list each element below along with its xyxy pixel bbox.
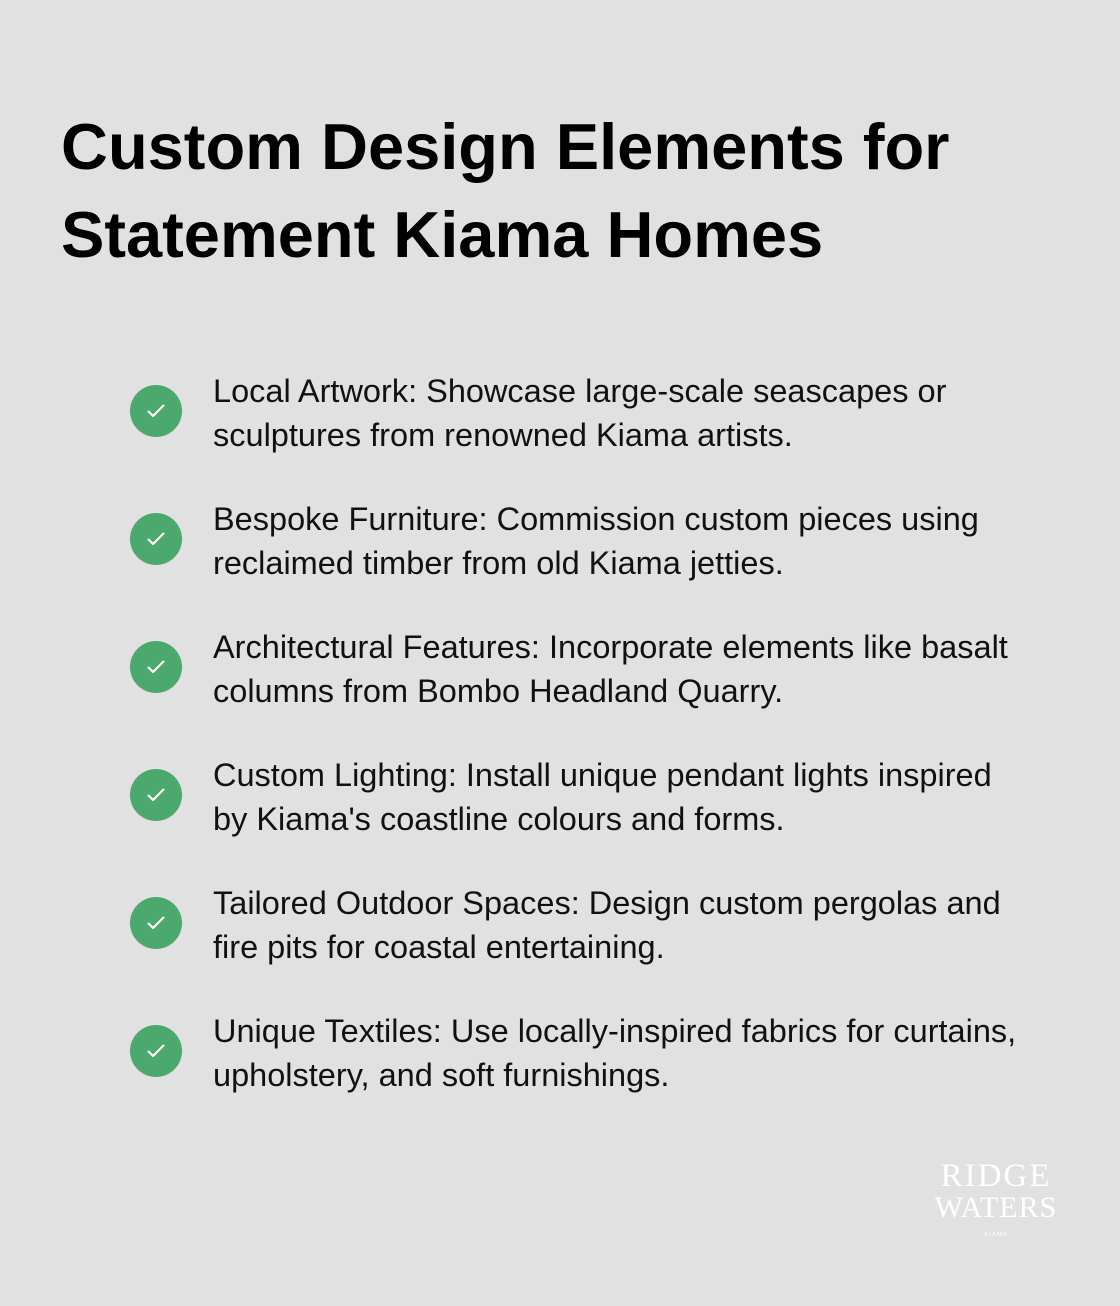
text bbox=[213, 885, 1001, 965]
logo bbox=[934, 1158, 1057, 1238]
text: Tailored Outdoor Spaces: Design custom pergolas and bbox=[213, 885, 1001, 921]
item: architectural features bbox=[130, 629, 1008, 709]
text bbox=[213, 1013, 1016, 1093]
text: upholstery, and soft furnishings. bbox=[213, 1057, 669, 1093]
text: Custom Lighting: Install unique pendant lights inspired bbox=[213, 757, 992, 793]
item: local artwork bbox=[130, 373, 946, 453]
text bbox=[213, 629, 1008, 709]
icon: check bbox=[130, 513, 182, 565]
title: Statement Kiama Homes bbox=[61, 198, 823, 271]
item: outdoor spaces bbox=[130, 885, 1001, 965]
text: fire pits for coastal entertaining. bbox=[213, 929, 665, 965]
text: Architectural Features: Incorporate elements like basalt bbox=[213, 629, 1008, 665]
item: custom lighting bbox=[130, 757, 992, 837]
text: Unique Textiles: Use locally-inspired fabrics for curtains, bbox=[213, 1013, 1016, 1049]
text: sculptures from renowned Kiama artists. bbox=[213, 417, 793, 453]
logo: WATERS bbox=[935, 1191, 1057, 1224]
item: unique textiles bbox=[130, 1013, 1016, 1093]
icon: check bbox=[130, 897, 182, 949]
text: columns from Bombo Headland Quarry. bbox=[213, 673, 783, 709]
icon: check bbox=[130, 385, 182, 437]
text bbox=[213, 373, 946, 453]
logo: RIDGE bbox=[941, 1158, 1051, 1194]
icon: check bbox=[130, 641, 182, 693]
item: bespoke furniture bbox=[130, 501, 979, 581]
icon: check bbox=[130, 1025, 182, 1077]
text bbox=[213, 757, 992, 837]
logo: KIAMA bbox=[984, 1232, 1008, 1238]
text: Local Artwork: Showcase large-scale seascapes or bbox=[213, 373, 946, 409]
text: by Kiama's coastline colours and forms. bbox=[213, 801, 785, 837]
text: Bespoke Furniture: Commission custom pieces using bbox=[213, 501, 979, 537]
text: reclaimed timber from old Kiama jetties. bbox=[213, 545, 784, 581]
title bbox=[61, 110, 949, 271]
text bbox=[213, 501, 979, 581]
title: Custom Design Elements for bbox=[61, 110, 949, 183]
icon: check bbox=[130, 769, 182, 821]
